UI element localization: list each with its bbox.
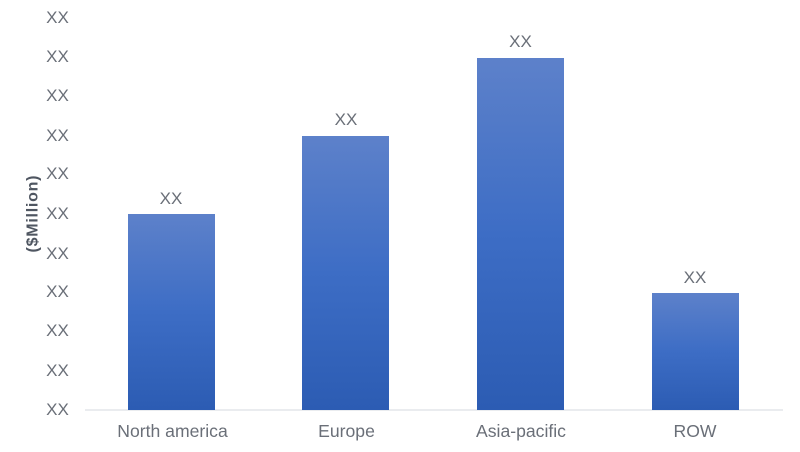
bar: North america: North america: [117, 421, 228, 441]
y-axis tick labels: XX: [46, 361, 69, 380]
bar: ROW: XX: [684, 268, 706, 287]
bar: Europe: [302, 110, 389, 441]
y-axis tick labels: [46, 8, 69, 419]
y-axis tick labels: XX: [46, 164, 69, 183]
y-axis tick labels: XX: [46, 47, 69, 66]
bar: Asia-pacific: [476, 32, 566, 441]
y-axis tick labels: XX: [46, 8, 69, 27]
bar: Asia-pacific: XX: [509, 32, 532, 51]
y-axis title: ($Million): [24, 176, 42, 252]
y-axis tick labels: XX: [46, 400, 69, 419]
y-axis tick labels: XX: [46, 321, 69, 340]
y-axis tick labels: XX: [46, 204, 69, 223]
bar: Europe: Europe: [318, 421, 375, 441]
y-axis tick labels: XX: [46, 86, 69, 105]
y-axis tick labels: XX: [46, 126, 69, 145]
bar: Asia-pacific: Asia-pacific: [476, 421, 566, 441]
bar: North america: XX: [160, 189, 182, 208]
bar: ROW: [652, 268, 739, 441]
bar: ROW: ROW: [674, 421, 717, 441]
bar: North america: [117, 189, 228, 441]
bar: Europe: XX: [335, 110, 357, 129]
y-axis tick labels: XX: [46, 282, 69, 301]
y-axis tick labels: XX: [46, 244, 69, 263]
